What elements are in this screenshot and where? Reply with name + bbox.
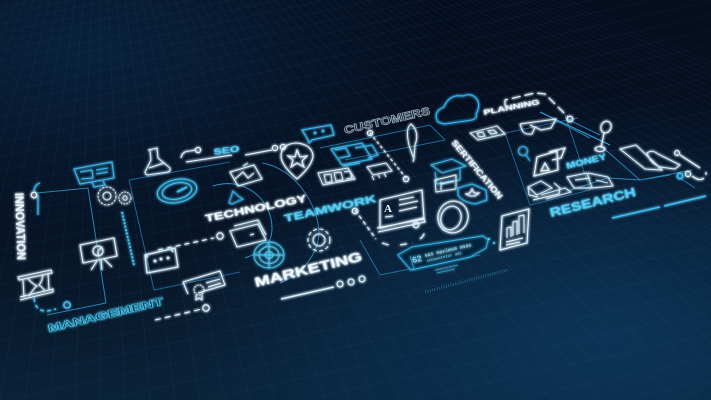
icon: joystick lever [595,119,613,152]
title: TEAMWORK: TEAMWORK [283,193,378,225]
icon: certificate [183,271,225,300]
icon: chart folder [230,163,262,186]
icon: scanned docs [470,126,505,140]
cyan node and path by hourglass [34,298,56,311]
callout: data label: consectetur adi [426,251,463,264]
icon: gears [98,187,131,205]
icon: flask [145,148,170,175]
title: MARKETING: MARKETING [253,249,363,290]
icon: gauge [155,176,199,206]
icon: document laptop [377,190,425,232]
icon: cloud [436,95,479,124]
icon: chip [367,163,392,180]
callout: data label: sas maximum msac [424,242,472,259]
icon: shield star [458,184,487,204]
title: MANAGEMENT: MANAGEMENT [47,295,165,335]
title: SEO: SEO [213,144,240,157]
icon: presentation board [80,238,117,270]
icon: devices [620,145,680,170]
title: INNOVATION: INNOVATION [12,193,28,260]
callout: data label [398,236,495,273]
icon: location pin star [281,143,313,179]
icon: card browser [435,175,456,192]
icon: hourglass [18,270,53,300]
title: MONEY: MONEY [565,151,608,171]
icon: handshake panels [567,173,613,188]
icon: target [254,242,284,268]
icon: magnifier [518,146,530,161]
decorative ticks [425,270,508,292]
icon: calendar box [145,248,178,273]
icon: bell [229,191,243,204]
icon: boxes stack [528,181,571,200]
icon: warning tablet [534,148,565,176]
title: PLANNING: PLANNING [483,99,541,117]
icon: glasses [520,119,556,134]
icon: bar chart report [500,209,529,250]
icon: wallet cards [230,220,266,247]
title: SERTIFICATION: SERTIFICATION [449,139,504,201]
icon: open box [431,159,466,184]
icon: feather [407,124,417,162]
icon: speech bubble [302,125,334,143]
blue connector panels [37,112,695,315]
title: CUSTOMERS: CUSTOMERS [343,105,431,137]
icon: laptop screens [331,143,378,166]
icon: ring [433,197,473,237]
dashed connectors [155,93,706,320]
title: RESEARCH: RESEARCH [548,185,637,220]
text: A [384,203,392,215]
icon: monitor [74,162,114,187]
callout: data label: 62 [411,253,423,265]
icon: keypad panel [318,168,355,185]
icon: gear [308,229,330,251]
title: TECHNOLOGY: TECHNOLOGY [204,193,308,225]
